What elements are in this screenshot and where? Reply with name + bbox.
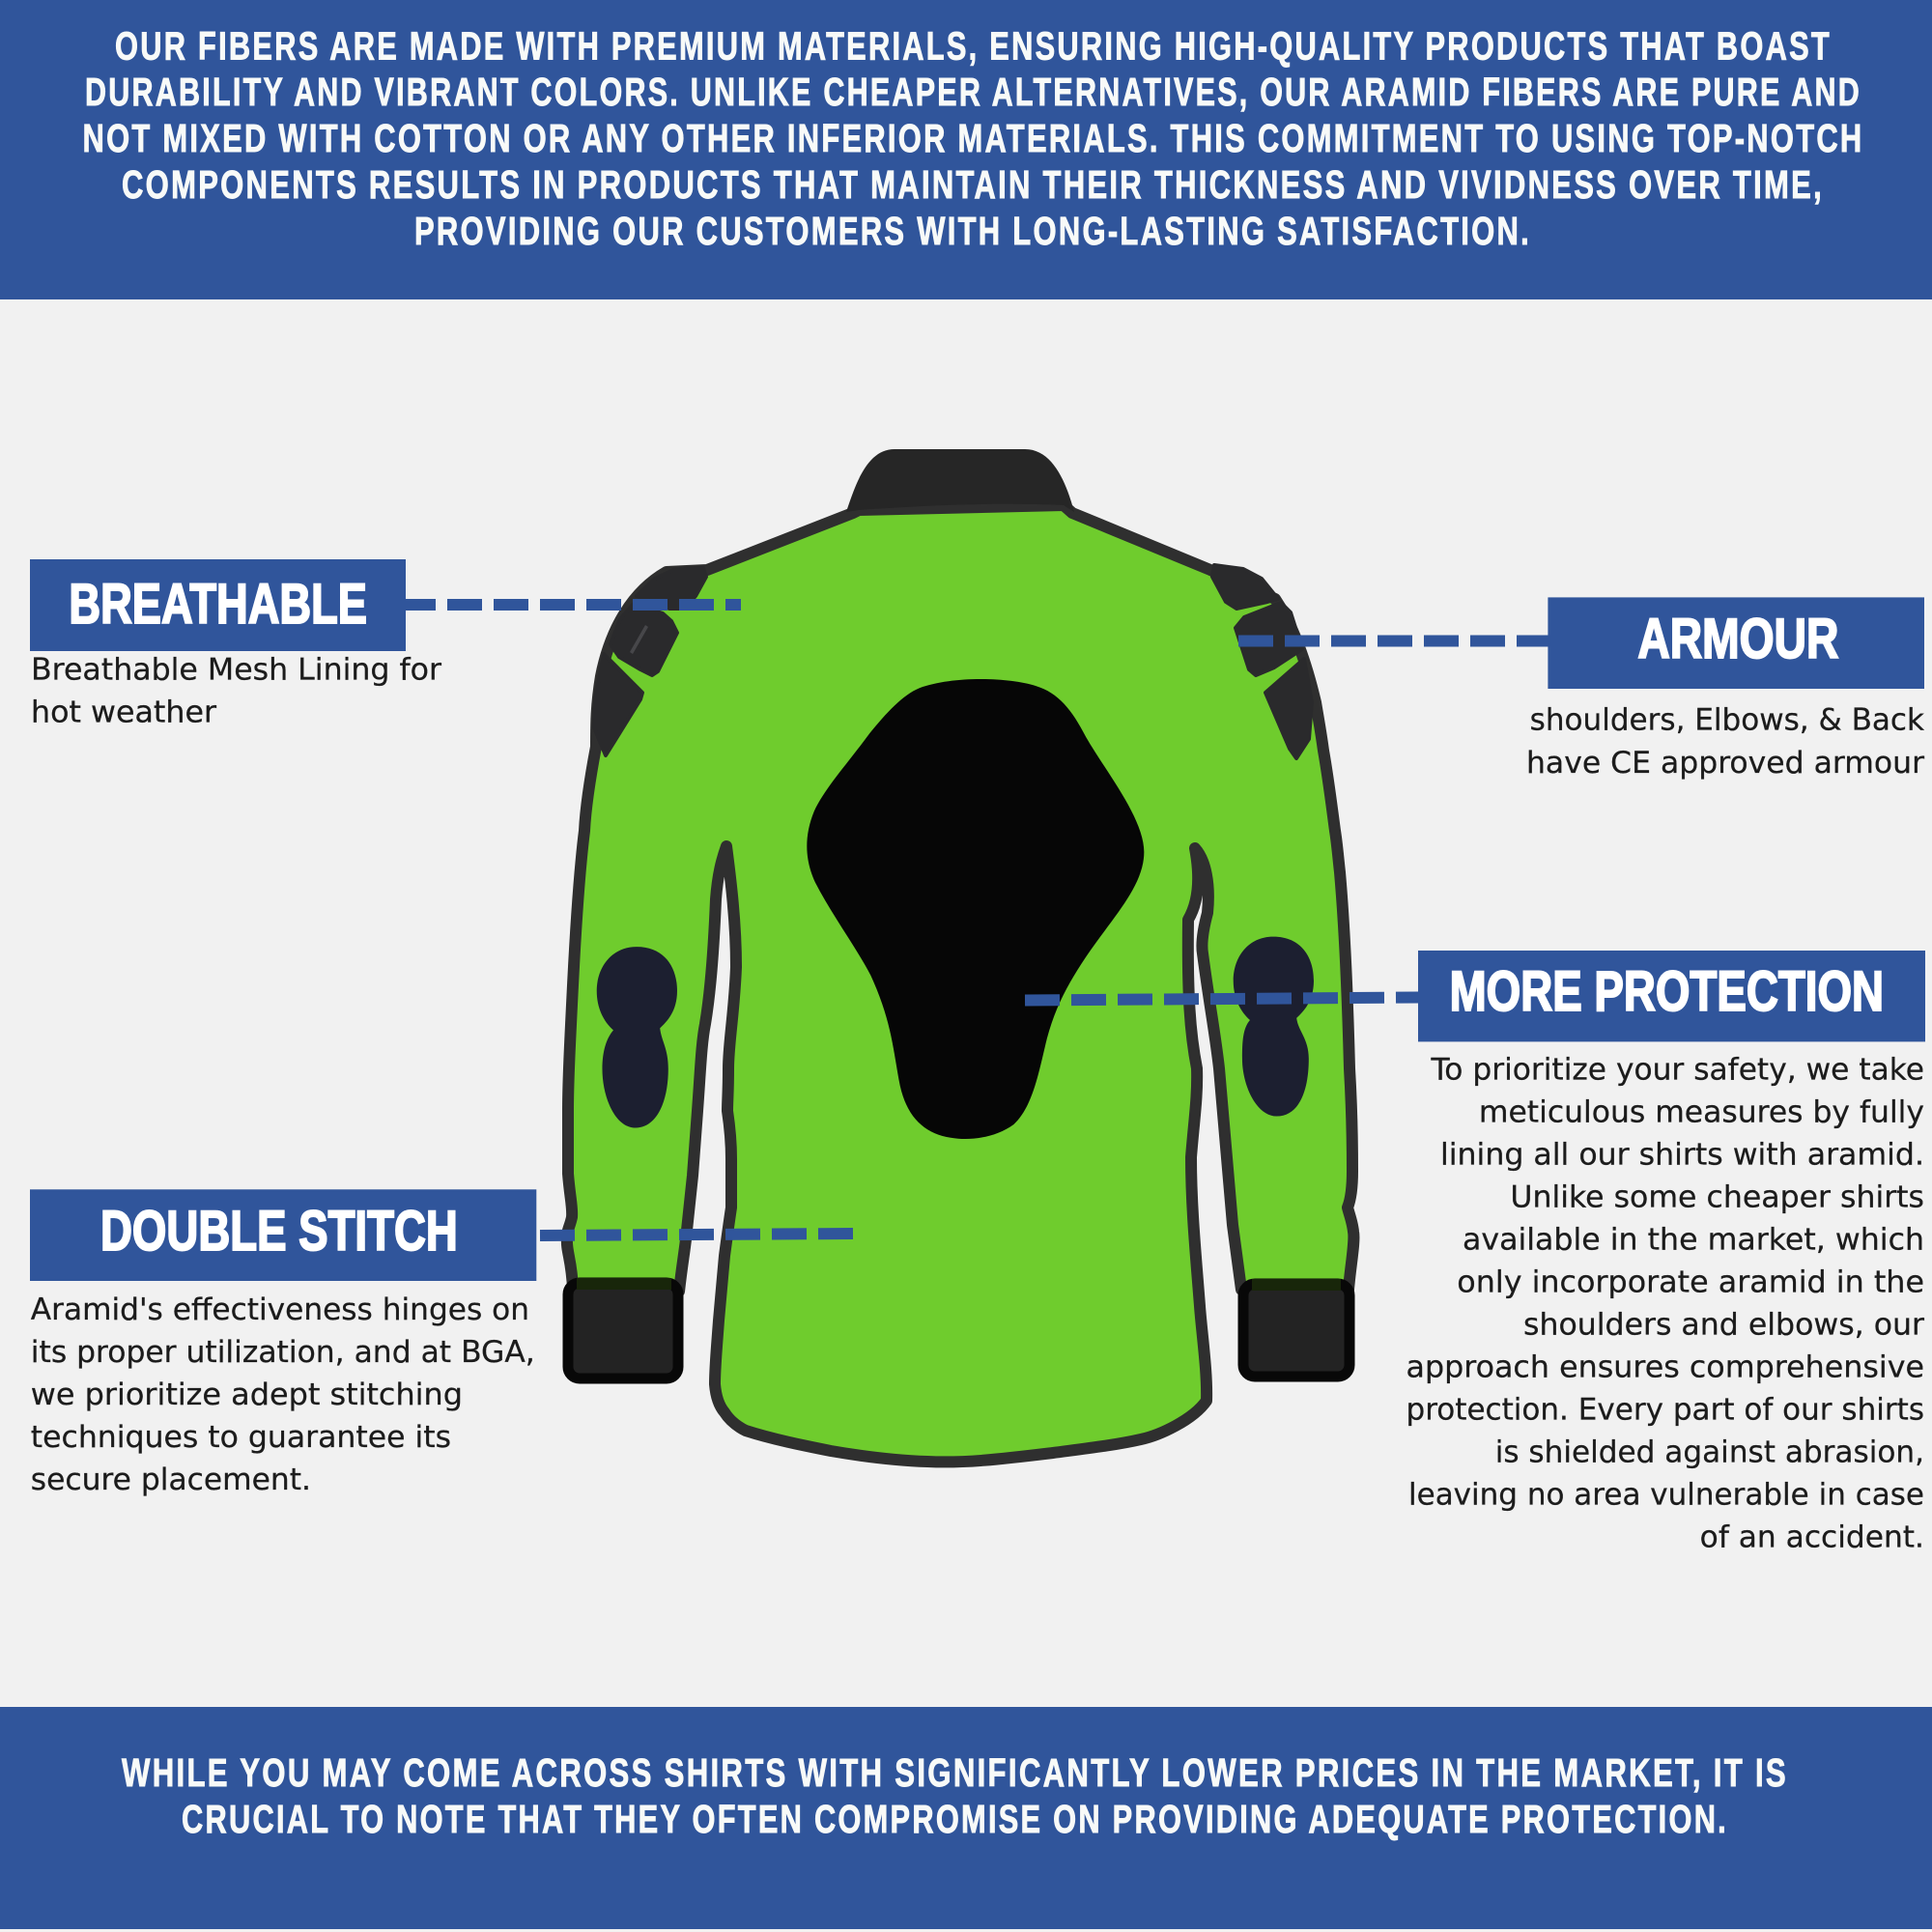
more protection description: available in the market, which — [1463, 1222, 1924, 1257]
armour description: shoulders, Elbows, & Back — [1530, 702, 1924, 737]
double stitch description: its proper utilization, and at BGA, — [31, 1335, 535, 1370]
breathable label — [30, 559, 406, 651]
callout: breathable: hot weather — [31, 696, 216, 730]
top banner — [0, 0, 1932, 299]
more protection description: To prioritize your safety, we take — [1430, 1052, 1924, 1087]
left cuff — [568, 1278, 678, 1378]
callout: more protection — [1025, 951, 1925, 1554]
jacket illustration — [567, 449, 1353, 1462]
more protection description: meticulous measures by fully — [1479, 1094, 1924, 1129]
more protection description — [1406, 1052, 1924, 1554]
double stitch description — [31, 1293, 535, 1497]
more protection description: only incorporate aramid in the — [1457, 1264, 1924, 1299]
more protection description: of an accident. — [1700, 1520, 1924, 1554]
armour connector — [1238, 636, 1548, 647]
bottom banner — [0, 1707, 1932, 1929]
right cuff — [1243, 1279, 1350, 1377]
double stitch description: Aramid's effectiveness hinges on — [31, 1293, 529, 1327]
breathable description: Breathable Mesh Lining for — [31, 652, 441, 687]
back armour pad — [807, 679, 1144, 1139]
more protection label — [1418, 951, 1925, 1041]
double stitch label — [30, 1189, 536, 1281]
jacket body and sleeves — [567, 505, 1353, 1462]
double stitch connector — [540, 1234, 853, 1236]
more protection connector — [1025, 997, 1419, 1001]
callout: breathable: BREATHABLE — [69, 573, 367, 636]
armour label — [1548, 597, 1924, 689]
right shoulder armour — [1212, 565, 1312, 758]
callout: breathable — [30, 559, 741, 730]
callout: armour — [1238, 597, 1924, 781]
left elbow pad — [597, 947, 677, 1127]
more protection description: approach ensures comprehensive — [1406, 1350, 1924, 1384]
double stitch description: we prioritize adept stitching — [31, 1378, 463, 1412]
callout: armour: ARMOUR — [1637, 608, 1838, 670]
breathable connector — [406, 599, 741, 611]
more protection description: lining all our shirts with aramid. — [1440, 1137, 1924, 1172]
double stitch description: secure placement. — [31, 1463, 311, 1497]
more protection description: protection. Every part of our shirts — [1406, 1392, 1924, 1427]
collar — [846, 449, 1074, 512]
callout: double stitch: DOUBLE STITCH — [100, 1200, 458, 1263]
callout: armour: have CE approved armour — [1526, 746, 1924, 781]
double stitch description: techniques to guarantee its — [31, 1420, 451, 1455]
more protection description: Unlike some cheaper shirts — [1510, 1179, 1924, 1214]
callout: double stitch — [30, 1189, 853, 1497]
top banner: PROVIDING OUR CUSTOMERS WITH LONG-LASTING SATISFACTION. — [414, 209, 1531, 253]
more protection description: is shielded against abrasion, — [1495, 1435, 1924, 1469]
right elbow pad — [1234, 937, 1314, 1117]
more protection description: shoulders and elbows, our — [1523, 1307, 1924, 1342]
left shoulder armour — [594, 568, 706, 755]
more protection description: leaving no area vulnerable in case — [1408, 1477, 1924, 1512]
